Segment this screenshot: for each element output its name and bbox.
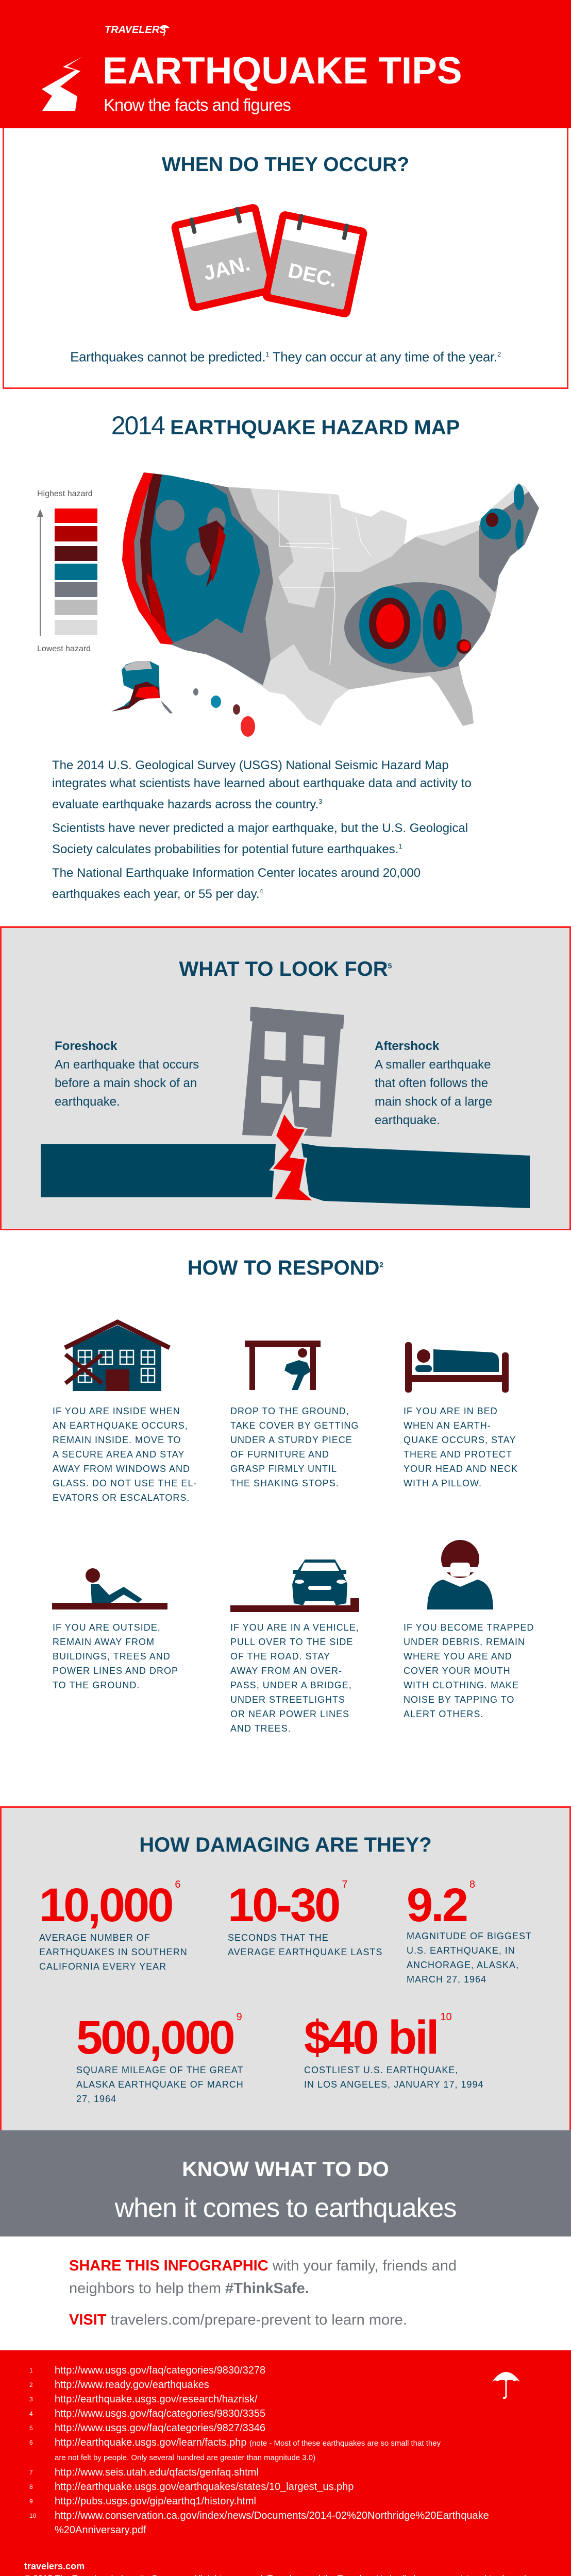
text: respond 1: IF YOU ARE INSIDE WHEN — [53, 1406, 180, 1416]
text: respond 4 — [53, 1622, 178, 1690]
text: respond 4: REMAIN AWAY FROM — [53, 1637, 155, 1647]
stat: $40 bil: $40 bil 10 — [304, 2011, 452, 2064]
text: respond 1: EVATORS OR ESCALATORS. — [53, 1493, 190, 1503]
title: EARTHQUAKE TIPS — [103, 50, 462, 92]
panel: what to look for — [0, 926, 571, 1230]
text: respond 4: BUILDINGS, TREES AND — [53, 1651, 171, 1662]
text: aftershock — [375, 1039, 492, 1127]
legend: Lowest hazard — [37, 645, 91, 653]
stat: 500,000: SQUARE MILEAGE OF THE GREAT — [76, 2065, 243, 2075]
text: respond 6: IF YOU BECOME TRAPPED — [404, 1622, 534, 1633]
icon: lightning crack — [42, 57, 82, 111]
text: respond 4: POWER LINES AND DROP — [53, 1666, 178, 1676]
text: respond 5: AND TREES. — [230, 1723, 291, 1734]
text: respond 1: AWAY FROM WINDOWS AND — [53, 1464, 190, 1474]
stat: 10-30: 10-30 7 — [228, 1879, 347, 1931]
icon: calendars: DEC. — [286, 259, 339, 292]
text: map description: integrates what scientists have learned about earthquake data and activity to — [52, 776, 472, 790]
stat: 9.2: ANCHORAGE, ALASKA, — [407, 1960, 519, 1970]
text: respond 5: AWAY FROM AN OVER- — [230, 1666, 342, 1676]
text: respond 3: YOUR HEAD AND NECK — [404, 1464, 518, 1474]
text: respond 5: UNDER STREETLIGHTS — [230, 1694, 345, 1705]
icon: calendars: JAN. — [201, 252, 252, 285]
banner: know what to do: KNOW WHAT TO DO — [182, 2157, 389, 2181]
text: aftershock: that often follows the — [375, 1076, 488, 1090]
stat: $40 bil: COSTLIEST U.S. EARTHQUAKE, — [304, 2065, 458, 2075]
text: map description: Society calculates probabilities for potential future earthquakes.1 — [52, 842, 402, 856]
legend: Highest hazard — [37, 489, 93, 498]
footnotes: http://www.ready.gov/earthquakes — [55, 2379, 209, 2391]
text: map description: earthquakes each year, or 55 per day.4 — [52, 887, 263, 901]
text: respond 2: GRASP FIRMLY UNTIL — [230, 1464, 337, 1474]
logo: Travelers: TRAVELERS — [105, 24, 166, 36]
footnotes: 10 — [29, 2512, 36, 2519]
footnotes: 9 — [29, 2498, 33, 2505]
text: foreshock: before a main shock of an — [55, 1076, 197, 1090]
text: respond 4: IF YOU ARE OUTSIDE, — [53, 1622, 161, 1633]
text: map description: Scientists have never predicted a major earthquake, but the U.S. Geological — [52, 821, 468, 835]
map title: 2014 EARTHQUAKE HAZARD MAP — [111, 411, 460, 440]
hazard map — [111, 472, 539, 737]
stat: 9.2: 9.2 8 — [407, 1879, 475, 1931]
text: aftershock: Aftershock — [375, 1039, 439, 1053]
stat: 500,000: 500,000 9 — [76, 2011, 242, 2064]
stat: 9.2: MAGNITUDE OF BIGGEST — [407, 1931, 532, 1941]
text: respond 6: NOISE BY TAPPING TO — [404, 1694, 514, 1705]
icon: person lying on ground — [52, 1568, 167, 1609]
footnotes: http://www.usgs.gov/faq/categories/9827/3346 — [55, 2422, 265, 2434]
footnotes: 4 — [29, 2410, 33, 2417]
text: share: VISIT travelers.com/prepare-prevent to learn more. — [69, 2312, 407, 2328]
icon: drop and take cover — [245, 1341, 321, 1390]
copyright — [24, 2561, 533, 2576]
text: respond 3: WITH A PILLOW. — [404, 1478, 482, 1488]
stat: $40 bil — [304, 2011, 483, 2090]
text: respond 3: QUAKE OCCURS, STAY — [404, 1435, 516, 1445]
text: respond 2: OF FURNITURE AND — [230, 1449, 329, 1460]
icon: person in bed — [405, 1342, 509, 1393]
text: foreshock: earthquake. — [55, 1095, 120, 1109]
stat: 10-30 — [228, 1879, 382, 1957]
text: aftershock: main shock of a large — [375, 1095, 492, 1109]
header banner — [0, 0, 571, 128]
text: map description: The National Earthquake Information Center locates around 20,000 — [52, 866, 421, 880]
icon: trapped person with mask — [427, 1540, 493, 1609]
text: map description: evaluate earthquake hazards across the country.3 — [52, 798, 322, 811]
heading: WHAT TO LOOK FOR5 — [179, 958, 392, 980]
text: respond 3: WHEN AN EARTH- — [404, 1420, 491, 1431]
text: respond 6: WHERE YOU ARE AND — [404, 1651, 512, 1662]
text: aftershock: earthquake. — [375, 1113, 440, 1127]
text: respond 5: OF THE ROAD. STAY — [230, 1651, 330, 1662]
stat: 9.2: MARCH 27, 1964 — [407, 1974, 486, 1985]
panel: how damaging are they — [0, 1806, 571, 2131]
text: respond 2: THE SHAKING STOPS. — [230, 1478, 339, 1488]
text: aftershock: A smaller earthquake — [375, 1058, 491, 1072]
text: foreshock: Foreshock — [55, 1039, 117, 1053]
footnotes: 6 — [29, 2439, 33, 2446]
illustration: cracked building and ground — [41, 1007, 530, 1208]
text: respond 5: IF YOU ARE IN A VEHICLE, — [230, 1622, 359, 1633]
stat: 10,000: AVERAGE NUMBER OF — [39, 1933, 150, 1943]
text: respond 2: UNDER A STURDY PIECE — [230, 1435, 352, 1445]
text: respond 4: TO THE GROUND. — [53, 1680, 140, 1690]
text: respond 3 — [404, 1406, 518, 1488]
stat: 500,000 — [76, 2011, 244, 2104]
text: share: SHARE THIS INFOGRAPHIC with your family, friends and neighbors to help them #ThinkSafe. — [69, 2258, 457, 2297]
text: respond 6 — [404, 1622, 534, 1719]
legend — [37, 489, 97, 653]
text: respond 2: TAKE COVER BY GETTING — [230, 1420, 359, 1431]
footnotes: are not felt by people. Only several hundred are greater than magnitude 3.0) — [55, 2453, 315, 2462]
icon: calendars — [171, 204, 367, 317]
heading: how to respond: HOW TO RESPOND2 — [188, 1257, 383, 1279]
text: respond 6: UNDER DEBRIS, REMAIN — [404, 1637, 525, 1647]
text: respond 2: DROP TO THE GROUND, — [230, 1406, 349, 1416]
footnotes: 7 — [29, 2469, 33, 2476]
copyright: travelers.com — [24, 2561, 85, 2571]
footnotes: %20Anniversary.pdf — [55, 2524, 146, 2536]
icon: house with X — [64, 1319, 171, 1391]
text: foreshock: An earthquake that occurs — [55, 1058, 199, 1072]
panel: when do they occur — [3, 128, 568, 389]
footer: sources — [0, 2350, 571, 2576]
text: respond 1: A SECURE AREA AND STAY — [53, 1449, 184, 1460]
footnotes: http://earthquake.usgs.gov/earthquakes/states/10_largest_us.php — [55, 2481, 354, 2493]
heading: WHEN DO THEY OCCUR? — [162, 154, 409, 176]
text: share — [69, 2258, 457, 2328]
banner: know what to do: when it comes to earthquakes — [115, 2193, 456, 2223]
stat: 9.2: U.S. EARTHQUAKE, IN — [407, 1945, 515, 1956]
footnotes: http://www.usgs.gov/faq/categories/9830/3278 — [55, 2365, 265, 2376]
heading: HOW DAMAGING ARE THEY? — [139, 1834, 432, 1856]
text: respond 5: PASS, UNDER A BRIDGE, — [230, 1680, 352, 1690]
stat: 9.2 — [407, 1879, 532, 1985]
footnotes: http://earthquake.usgs.gov/research/hazrisk/ — [55, 2394, 258, 2405]
footnotes: http://earthquake.usgs.gov/learn/facts.php (note - Most of these earthquakes are so small that they — [55, 2437, 441, 2448]
stat: 500,000: 27, 1964 — [76, 2094, 116, 2104]
stat: 10-30: SECONDS THAT THE — [228, 1933, 329, 1943]
text: respond 3: THERE AND PROTECT — [404, 1449, 512, 1460]
stat: 10,000: 10,000 6 — [39, 1879, 181, 1931]
icon: car pulled over — [230, 1560, 359, 1612]
footnotes — [29, 2365, 489, 2536]
text: respond 5: PULL OVER TO THE SIDE — [230, 1637, 353, 1647]
text: map description — [52, 758, 472, 901]
stat: 500,000: ALASKA EARTHQUAKE OF MARCH — [76, 2079, 244, 2090]
footnotes: 2 — [29, 2381, 33, 2388]
footnotes: 5 — [29, 2425, 33, 2432]
footnotes: http://www.seis.utah.edu/qfacts/genfaq.shtml — [55, 2467, 259, 2478]
footnotes: 8 — [29, 2483, 33, 2490]
stat: 10-30: AVERAGE EARTHQUAKE LASTS — [228, 1947, 382, 1957]
icon: umbrella — [492, 2372, 520, 2399]
text: respond 6: COVER YOUR MOUTH — [404, 1666, 511, 1676]
stat: 10,000 — [39, 1879, 188, 1972]
text: respond 3: IF YOU ARE IN BED — [404, 1406, 498, 1416]
text: respond 6: WITH CLOTHING. MAKE — [404, 1680, 519, 1690]
footnotes: http://pubs.usgs.gov/gip/earthq1/history.html — [55, 2496, 256, 2507]
stat: 10,000: EARTHQUAKES IN SOUTHERN — [39, 1947, 188, 1957]
text: respond 2 — [230, 1406, 359, 1488]
banner: know what to do — [0, 2130, 571, 2236]
text: foreshock — [55, 1039, 199, 1109]
text: respond 1: REMAIN INSIDE. MOVE TO — [53, 1435, 181, 1445]
stat: 10,000: CALIFORNIA EVERY YEAR — [39, 1961, 166, 1972]
text: respond 1 — [53, 1406, 197, 1503]
stat: $40 bil: IN LOS ANGELES, JANUARY 17, 1994 — [304, 2079, 483, 2090]
text: respond 5: OR NEAR POWER LINES — [230, 1709, 349, 1719]
text: respond 1: GLASS. DO NOT USE THE EL- — [53, 1478, 197, 1488]
footnotes: 1 — [29, 2367, 33, 2374]
text: map description: The 2014 U.S. Geological Survey (USGS) National Seismic Hazard Map — [52, 758, 449, 772]
footnotes: http://www.conservation.ca.gov/index/news/Documents/2014-02%20Northridge%20Earthquake — [55, 2510, 489, 2521]
caption: Earthquakes cannot be predicted.1 They can occur at any time of the year.2 — [70, 349, 501, 365]
text: respond 1: AN EARTHQUAKE OCCURS, — [53, 1420, 188, 1431]
footnotes: http://www.usgs.gov/faq/categories/9830/3355 — [55, 2408, 265, 2419]
text: respond 5 — [230, 1622, 359, 1734]
footnotes: 3 — [29, 2396, 33, 2403]
text: respond 6: ALERT OTHERS. — [404, 1709, 483, 1719]
subtitle: Know the facts and figures — [104, 95, 291, 114]
